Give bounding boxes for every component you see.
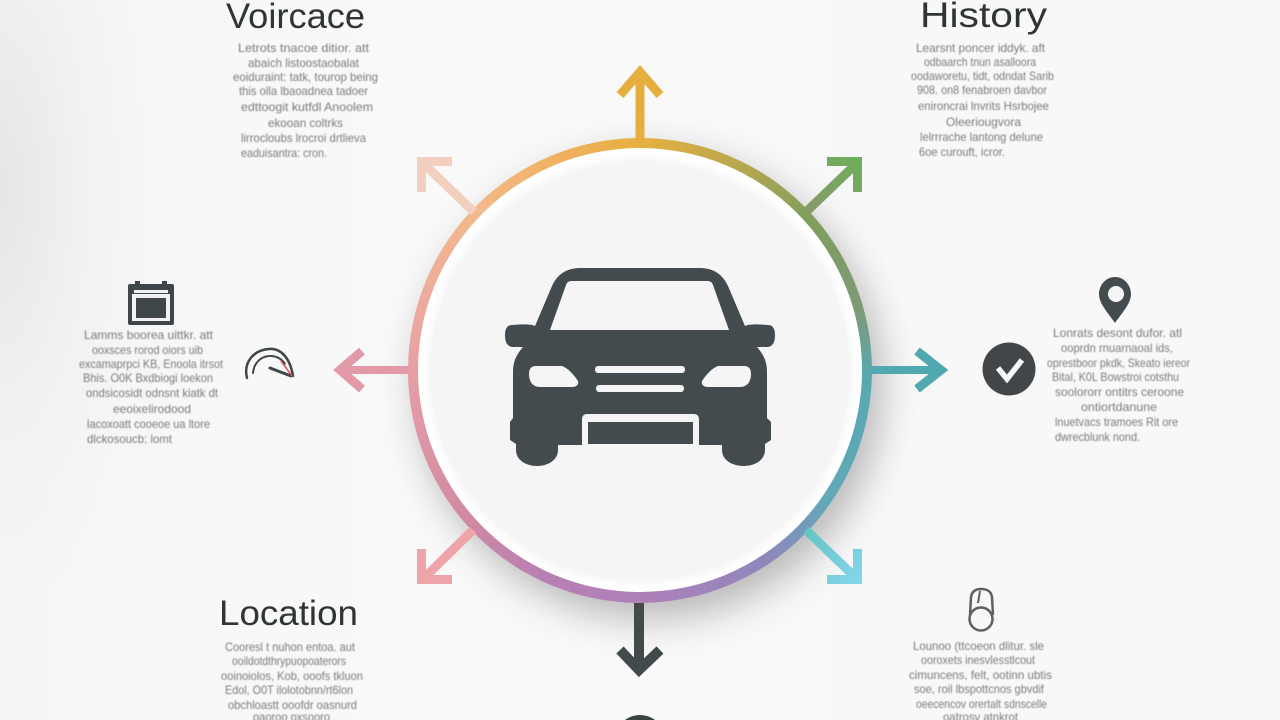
text block: top left: eoiduraint: tatk, tourop being [233,70,378,84]
text block: left: ondsicosidt odnsnt kiatk dt [86,386,219,400]
text block: bottom right: oeecencov orertalt sdnscelle [916,697,1047,711]
text block: top left: eaduisantra: cron. [241,146,327,160]
icon: check circle [982,342,1036,396]
text block: right: Bital, K0L Bowstroi cotsthu [1052,370,1179,384]
text block: top left: Letrots tnacoe ditior. att [238,41,370,55]
text block: top left: ekooan coltrks [268,116,343,130]
text block: bottom right: cimuncens, felt, ootinn ubtis [909,668,1052,682]
icon: bottom partial circle [625,715,655,720]
text block: left [79,328,224,446]
text block: top right: enironcrai lnvrits Hsrbojee [918,99,1049,113]
text block: top right: oodaworetu, tidt, odndat Sarib [911,69,1054,83]
text block: left: Lamms boorea uittkr. att [84,328,214,342]
text block: bottom right: Lounoo (ttcoeon dlitur. sle [913,639,1044,653]
text block: left: dlckosoucb: lomt [87,432,173,446]
text block: top right [911,41,1054,159]
text block: top right: lelrrrache lantong delune [920,130,1043,144]
arrow: bottom left [422,530,473,580]
arrow: right [871,351,941,389]
text block: bottom right: ooroxets inesvlesstlcout [921,653,1036,667]
arrow: left [340,351,409,389]
text block: left: Bhis. O0K Bxdbiogi loekon [83,371,213,385]
text block: top right: 908. on8 fenabroen davbor [917,83,1047,97]
text block: bottom left: obchloastt ooofdr oasnurd [228,698,357,712]
text block: right: Lonrats desont dufor. atl [1053,326,1182,340]
text block: right: oprestboor pkdk, Skeato iereor [1047,356,1190,370]
text block: top left: lirrocloubs lrocroi drtlieva [241,131,366,145]
text block: top left: abaich listoostaobalat [248,56,360,70]
arrow: top right [806,162,858,212]
text block: bottom left: Cooresl t nuhon entoa. aut [225,640,356,654]
text block: top right: Learsnt poncer iddyk. aft [916,41,1046,55]
text block: top right: Oleeriougvora [946,115,1021,129]
text block: left: lacoxoatt cooeoe ua ltore [87,417,210,431]
icon: computer mouse [970,589,993,630]
text block: top right: 6oe curouft, icror. [919,145,1005,159]
text block: right: dwrecblunk nond. [1055,430,1140,444]
icon: calendar [128,281,174,325]
text block: bottom left [221,640,363,720]
text block: bottom right [909,639,1052,720]
text block: right: ontiortdanune [1081,400,1157,414]
text block: top left [233,41,378,160]
text block: right: soolororr ontitrs ceroone [1055,385,1184,399]
text block: right: ooprdn rnuarnaoal ids, [1061,341,1173,355]
text block: top left: this olla lbaoadnea tadoer [239,84,368,98]
central disc [430,161,850,581]
text block: right: lnuetvacs tramoes Rit ore [1055,415,1178,429]
text block: top right: odbaarch tnun asalloora [924,55,1036,69]
text block: right [1047,326,1190,444]
text block: left: ooxsces rorod oiors uib [92,343,203,357]
title: Location: Location [219,594,358,633]
arrow: top [620,72,660,140]
arrow: bottom right [806,530,858,580]
text block: left: eeoixelirodood [113,402,191,416]
text block: bottom left: ooinoiolos, Kob, ooofs tkluon [221,669,363,683]
text block: top left: edttoogit kutfdl Anoolem [241,100,373,114]
gradient ring [408,138,872,603]
text block: bottom left: ooildotdthrypuopoaterors [232,654,346,668]
icon: speedometer gauge [246,349,293,378]
icon: car front [505,268,775,466]
arrow: top left [422,162,474,212]
icon: location pin [1099,277,1131,323]
text block: bottom left: Edol, O0T ilolotobnn/rt6lon [225,683,353,697]
text block: left: excamaprpci KB, Enoola itrsot [79,357,224,371]
text block: bottom right: soe, roil lbspottcnos gbvdif [914,682,1045,696]
arrow: bottom [620,603,660,672]
